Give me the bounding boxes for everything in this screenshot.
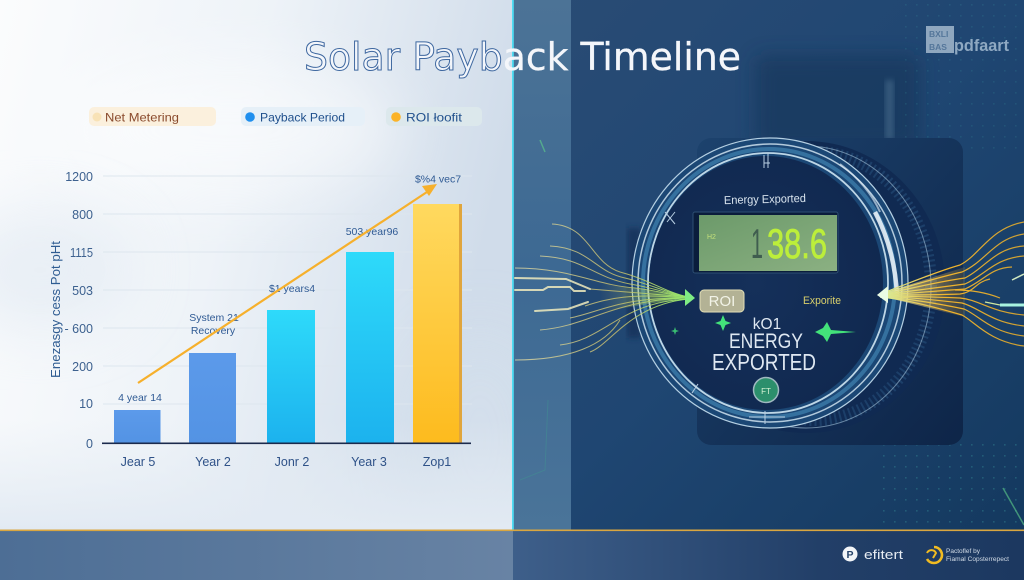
logo: top right watermark <box>926 26 1009 55</box>
legend item: payback period <box>241 107 365 126</box>
icon: electricity meter <box>632 138 945 433</box>
meter heading: Energy Exported <box>724 193 806 207</box>
y-axis labels: 800 <box>72 208 93 222</box>
panel: left chart background <box>0 0 550 550</box>
panel: footer band <box>0 530 1024 580</box>
legend item: net metering: Net Metering <box>105 110 179 124</box>
bar value labels: $%4 vec7 <box>415 174 461 186</box>
grid lines <box>103 176 472 404</box>
y-axis labels: 200 <box>72 360 93 374</box>
x-axis labels: Zop1 <box>423 455 451 469</box>
bar value labels <box>118 174 461 404</box>
bar chart <box>48 170 472 469</box>
meter body side <box>667 141 945 433</box>
x axis <box>102 442 471 444</box>
bar value labels: $1 years4 <box>269 283 315 295</box>
lcd display: 38.6 <box>767 220 827 267</box>
meter big label: EXPORTED <box>712 349 816 375</box>
footer logo: efitert <box>842 546 903 562</box>
footer logo: partner: Pactoflef by <box>946 548 981 555</box>
panel: right meter background <box>513 0 1024 530</box>
label: exported: Exporite <box>803 295 841 307</box>
arrow: growth trend <box>138 184 437 383</box>
y-axis labels: 1115 <box>70 246 93 260</box>
legend item: payback period: Payback Period <box>260 110 345 124</box>
sparkles <box>671 315 856 342</box>
meter rings <box>632 138 908 428</box>
lcd display: 1 <box>751 220 763 267</box>
footer logo: partner <box>927 547 1009 563</box>
badge: ROI: ROI <box>709 293 735 310</box>
logo: top right watermark: BAS <box>929 42 947 52</box>
bars <box>114 204 462 443</box>
title: Solar Payback Timeline <box>304 35 741 79</box>
lcd display: H2 <box>707 234 716 241</box>
x-axis labels: Year 3 <box>351 455 387 469</box>
x-axis labels: Jonr 2 <box>275 455 309 469</box>
bar value labels: 503 year96 <box>346 226 398 238</box>
meter big label <box>712 316 816 375</box>
bar value labels: System 21 <box>189 312 239 324</box>
meter big label: ENERGY <box>729 330 803 353</box>
y-axis labels <box>64 170 93 451</box>
divider: cyan vertical line <box>512 0 514 530</box>
bar value labels: Recovery <box>191 325 236 337</box>
meter back plate <box>627 138 963 445</box>
y-axis title: Enezasgy cess Pot pHt <box>48 241 63 378</box>
y-axis labels: 0 <box>86 437 93 451</box>
bar value labels: 4 year 14 <box>118 392 162 404</box>
y-axis labels: 1200 <box>65 170 93 184</box>
green button <box>754 378 778 402</box>
legend item: roi profit: ROI łoofit <box>406 110 463 124</box>
legend item: net metering <box>89 107 216 126</box>
meter ticks <box>665 153 785 424</box>
y-axis labels: - 600 <box>64 322 93 336</box>
footer logo: partner: Fiamal Copsterrepect <box>946 556 1009 563</box>
energy flow lines: left <box>515 224 690 360</box>
arrow: left green <box>685 289 695 306</box>
x-axis labels <box>121 455 451 469</box>
logo: top right watermark: pdfaart <box>954 36 1009 55</box>
energy flow lines: right <box>877 222 1024 346</box>
y-axis labels: 503 <box>72 284 93 298</box>
lcd display <box>693 212 838 273</box>
y-axis labels: 10 <box>79 397 93 411</box>
x-axis labels: Year 2 <box>195 455 231 469</box>
arrow: right green <box>877 286 888 303</box>
meter face <box>649 156 883 410</box>
legend <box>89 107 482 126</box>
footer logo: efitert: P <box>846 549 854 561</box>
meter big label: kO1 <box>753 316 781 333</box>
logo: top right watermark: BXLI <box>929 29 948 39</box>
green button: FT <box>761 387 771 396</box>
footer logo: efitert: efitert <box>864 547 903 562</box>
x-axis labels: Jear 5 <box>121 455 155 469</box>
legend item: roi profit <box>386 107 482 126</box>
badge: ROI <box>700 290 744 312</box>
